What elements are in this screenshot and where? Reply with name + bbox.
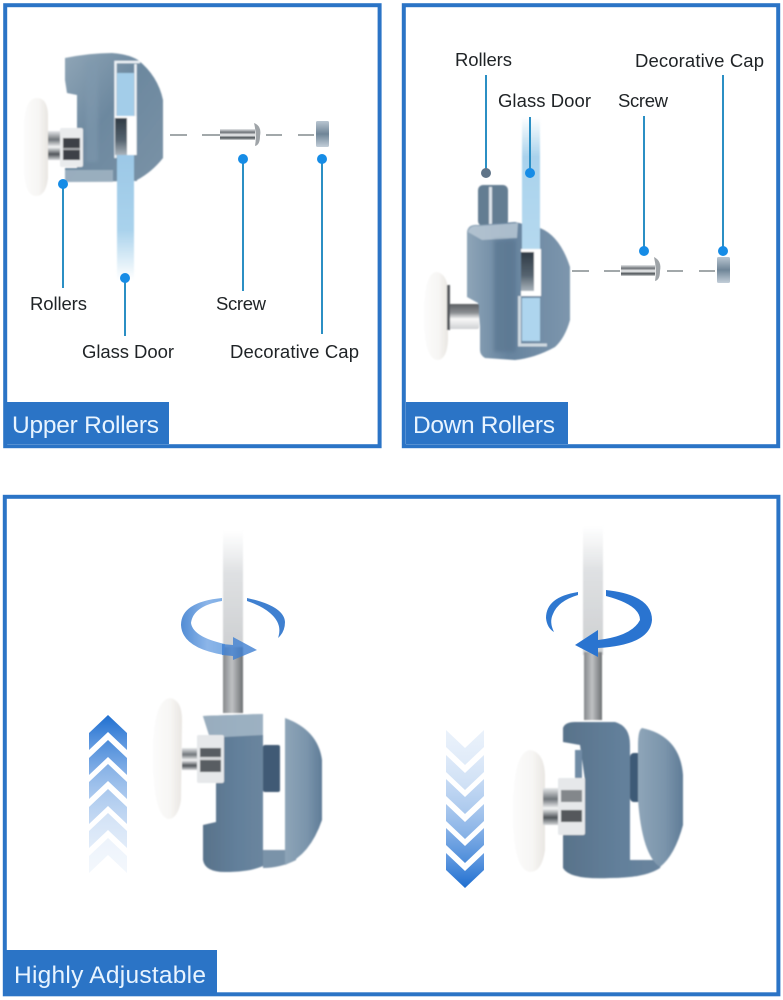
- leader: decorative cap: [317, 154, 327, 334]
- screwdriver shaft: [223, 530, 243, 650]
- axle: [447, 285, 479, 330]
- dashed axis: [170, 134, 314, 136]
- panel: upper rollers: [5, 5, 380, 446]
- upper roller assembly: [24, 53, 163, 280]
- housing top highlight: [468, 223, 518, 240]
- screwdriver tip: [223, 647, 243, 713]
- leader: screw: [639, 116, 649, 256]
- channel frame: [116, 62, 140, 158]
- panel: down rollers: [404, 5, 778, 446]
- leader: screw: [238, 154, 248, 291]
- heading tag: highly adjustable: Highly Adjustable: [14, 962, 206, 989]
- wheel: [424, 272, 448, 360]
- axle: [182, 748, 198, 770]
- rotation arrow clockwise: [181, 598, 285, 660]
- heading tag: upper rollers: [7, 402, 169, 444]
- leader: decorative cap: [718, 75, 728, 256]
- bridge: [263, 850, 297, 868]
- rotation arrow counterclockwise: [546, 590, 652, 657]
- upward chevrons: [89, 715, 127, 873]
- glass door: [522, 117, 540, 250]
- label: glass door: Glass Door: [498, 90, 591, 111]
- label: decorative cap: Decorative Cap: [230, 341, 359, 362]
- heading tag: down rollers: Down Rollers: [413, 412, 555, 439]
- right roller assembly: [513, 525, 683, 878]
- wheel: [153, 698, 182, 819]
- down roller assembly: [424, 117, 570, 360]
- wheel: [513, 750, 545, 872]
- label: glass door: Glass Door: [82, 341, 174, 362]
- glass door: [117, 73, 134, 116]
- label: decorative cap: Decorative Cap: [635, 50, 764, 71]
- leader: rollers: [481, 75, 491, 178]
- leader: glass door: [525, 117, 535, 178]
- glass door lower: [117, 155, 134, 280]
- heading tag: down rollers: [406, 402, 568, 444]
- heading tag: upper rollers: Upper Rollers: [12, 412, 159, 439]
- screwdriver tip: [584, 652, 602, 720]
- end cap: [638, 728, 683, 867]
- nut: [558, 778, 585, 835]
- screw: [621, 257, 660, 281]
- end cap: [285, 718, 322, 865]
- decorative cap: [316, 121, 329, 147]
- nut: [197, 735, 224, 783]
- pin: [630, 753, 648, 802]
- housing: [65, 53, 163, 182]
- downward chevrons: [446, 730, 484, 888]
- screw: [220, 123, 260, 146]
- glass door lower: [522, 298, 540, 341]
- label: rollers: Rollers: [30, 293, 87, 314]
- axle: [48, 131, 61, 160]
- stem: [478, 185, 508, 226]
- left roller assembly: [153, 530, 322, 872]
- pin: [263, 745, 280, 792]
- heading tag: highly adjustable: [6, 950, 217, 993]
- housing: [467, 222, 570, 360]
- label: rollers: Rollers: [455, 49, 512, 70]
- housing top wedge: [203, 714, 263, 738]
- leader: glass door: [120, 273, 130, 336]
- bottom bracket: [65, 170, 113, 182]
- housing: [563, 722, 663, 878]
- channel window: [521, 249, 541, 296]
- notch inner: [575, 750, 582, 780]
- nut: [60, 128, 83, 167]
- axle: [543, 788, 559, 825]
- housing: [203, 714, 263, 872]
- label: screw: Screw: [216, 293, 267, 314]
- housing dark side: [494, 240, 516, 352]
- label: screw: Screw: [618, 90, 669, 111]
- channel base: [520, 296, 547, 345]
- screwdriver shaft: [583, 525, 603, 655]
- decorative cap: [717, 257, 730, 283]
- leader: rollers: [58, 179, 68, 288]
- dashed axis: [572, 270, 715, 272]
- channel window: [115, 116, 136, 155]
- panel: highly adjustable: [5, 497, 778, 994]
- wheel: [24, 98, 48, 196]
- housing streak: [86, 62, 98, 162]
